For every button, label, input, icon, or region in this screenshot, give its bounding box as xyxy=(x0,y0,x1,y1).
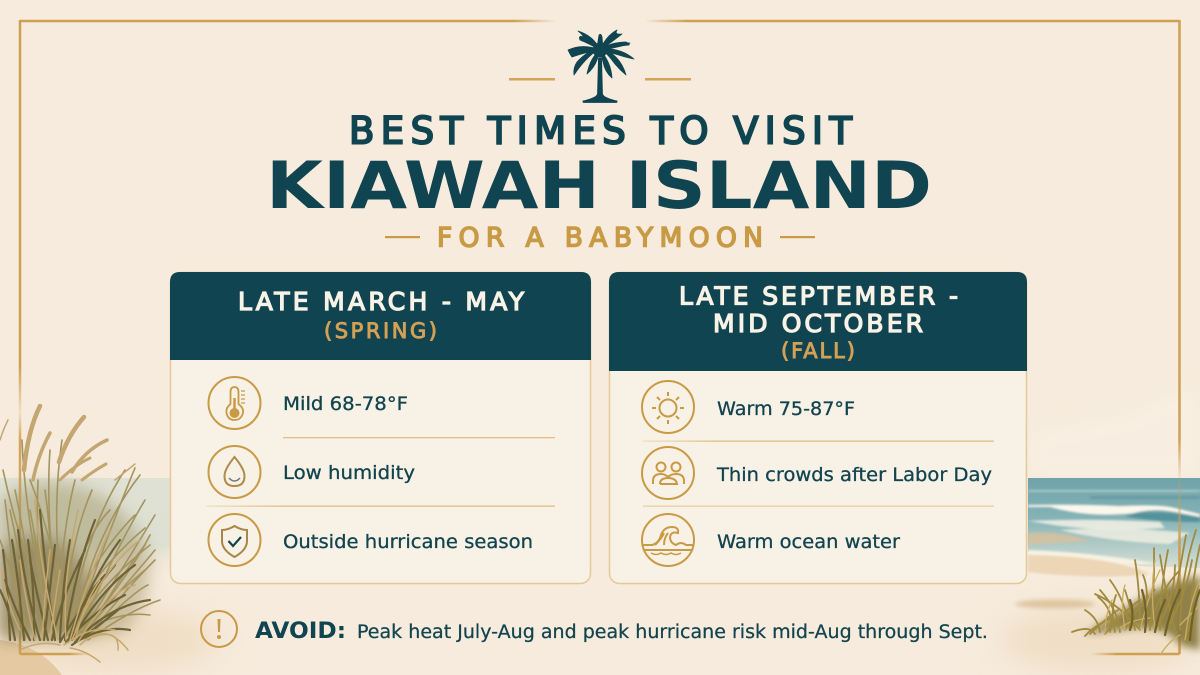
subheading dash: right xyxy=(780,236,815,238)
fall heading: LATE SEPTEMBER - xyxy=(679,282,958,310)
flanking rule: left of palm xyxy=(509,78,555,80)
fall card header xyxy=(609,272,1027,371)
spring season label: (SPRING) xyxy=(324,319,437,343)
panel: fall xyxy=(609,272,1027,584)
spring heading: LATE MARCH - MAY xyxy=(238,287,525,316)
icon: sun xyxy=(642,381,694,433)
text: warm ocean water: Warm ocean water xyxy=(717,531,900,553)
subheading dash: left xyxy=(385,236,420,238)
flanking rule: right of palm xyxy=(645,78,691,80)
fall heading second line: MID OCTOBER xyxy=(713,309,923,338)
divider xyxy=(283,437,555,438)
icon: palm tree xyxy=(568,30,634,102)
illustration: right dune grass xyxy=(1072,530,1200,655)
spring card body xyxy=(170,272,590,584)
heading: Kiawah Island: KIAWAH ISLAND xyxy=(266,149,932,224)
fall season label: (FALL) xyxy=(781,339,855,363)
avoid label: AVOID: xyxy=(255,619,346,644)
avoid text: Peak heat July-Aug and peak hurricane risk mid-Aug through Sept. xyxy=(357,622,988,643)
panel: spring xyxy=(170,272,591,584)
icon: water drop xyxy=(208,446,260,498)
divider xyxy=(643,440,994,442)
heading: best times to visit: BEST TIMES TO VISIT xyxy=(349,110,852,152)
scene: right beach and ocean xyxy=(1000,389,1200,674)
text: thin crowds: Thin crowds after Labor Day xyxy=(716,464,992,486)
icon: shield check xyxy=(208,514,260,566)
spring card header xyxy=(170,272,591,360)
icon: exclamation xyxy=(201,611,237,647)
text: mild temperature: Mild 68-78°F xyxy=(283,393,408,415)
illustration: left dune grass xyxy=(0,406,160,662)
scene: left shore xyxy=(0,478,220,675)
icon: thermometer xyxy=(208,377,260,429)
divider xyxy=(643,506,994,507)
icon: people xyxy=(642,447,694,499)
text: warm temperature: Warm 75-87°F xyxy=(717,398,855,420)
icon: wave xyxy=(642,514,694,566)
fall card body xyxy=(610,272,1026,584)
text: hurricane season: Outside hurricane season xyxy=(283,531,533,553)
subheading: for a babymoon: FOR A BABYMOON xyxy=(437,222,763,254)
callout: avoid xyxy=(201,611,988,647)
text: low humidity: Low humidity xyxy=(283,462,415,484)
divider xyxy=(206,506,555,507)
